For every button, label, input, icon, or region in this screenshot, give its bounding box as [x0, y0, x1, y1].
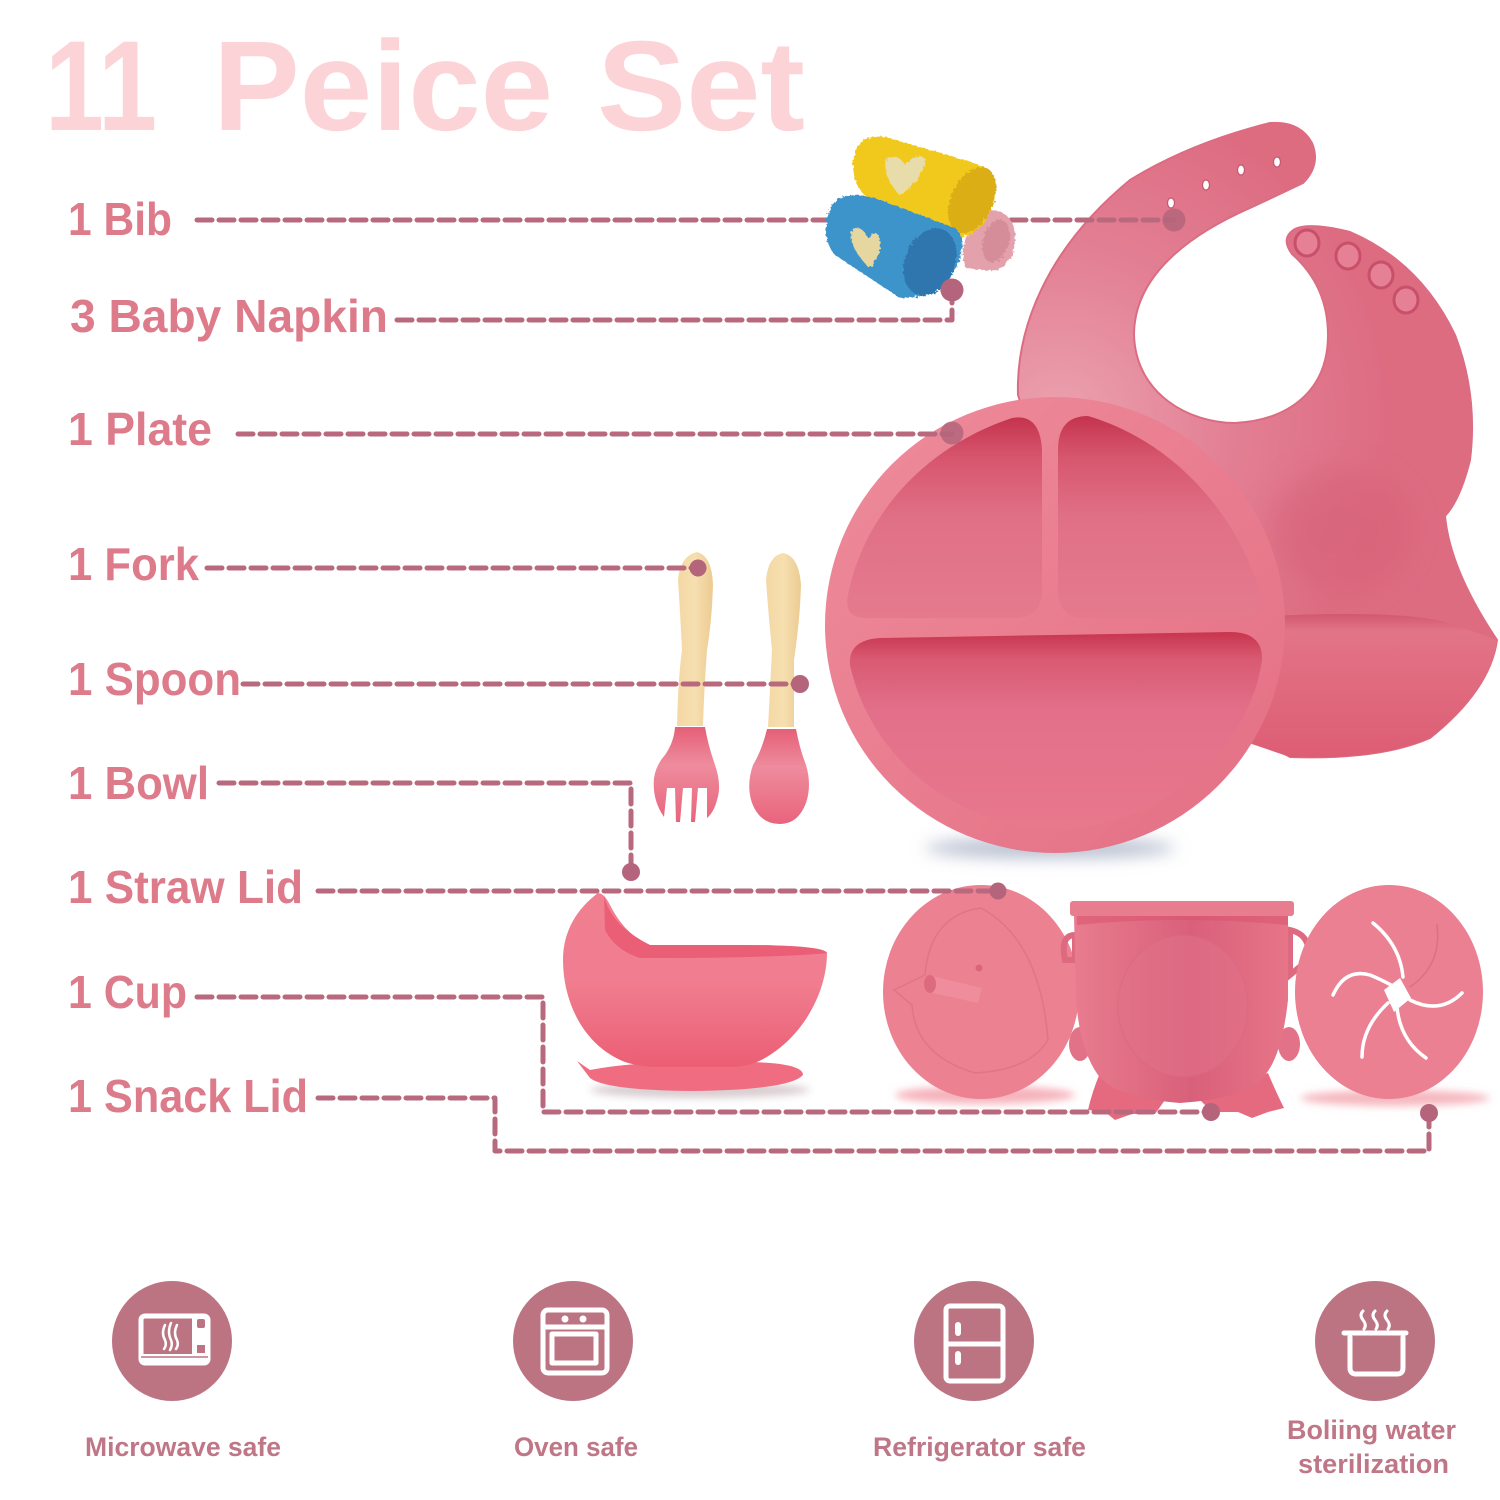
- connector: 3 Baby Napkin: [397, 292, 952, 320]
- title: Set: [597, 15, 805, 158]
- title: Peice: [213, 15, 553, 158]
- caption: refrigerator safe: Refrigerator safe: [873, 1432, 1086, 1462]
- illustration: snack lid: [1295, 885, 1490, 1106]
- yellow napkin: [853, 137, 1006, 241]
- label: 3 Baby Napkin: 3 Baby Napkin: [70, 290, 388, 342]
- label: 1 Snack Lid: 1 Snack Lid: [68, 1070, 308, 1122]
- marker dots: [622, 208, 1438, 1122]
- connector: 1 Plate: [238, 432, 952, 436]
- title: [45, 15, 805, 158]
- caption: microwave safe: Microwave safe: [85, 1432, 281, 1462]
- connector: 1 Bowl: [219, 783, 631, 872]
- illustration: straw lid: [883, 885, 1079, 1104]
- icon: boiling water sterilization: [1315, 1281, 1435, 1401]
- title: 11: [45, 15, 157, 158]
- connector: 1 Spoon: [243, 682, 800, 686]
- illustration: silicone bib: [1018, 123, 1497, 757]
- label: 1 Spoon: 1 Spoon: [68, 653, 241, 705]
- neck tab buttons: [1295, 230, 1418, 313]
- pink napkin: [963, 210, 1015, 270]
- caption: boiling water sterilization: [1287, 1415, 1456, 1479]
- label: 1 Plate: 1 Plate: [68, 403, 212, 455]
- connector: 1 Snack Lid: [318, 1098, 1429, 1151]
- label: 1 Bowl: 1 Bowl: [68, 757, 209, 809]
- illustration: spoon: [749, 553, 809, 824]
- connector: 1 Straw Lid: [318, 888, 998, 894]
- label: 1 Fork: 1 Fork: [68, 538, 199, 590]
- label: 1 Straw Lid: 1 Straw Lid: [68, 861, 303, 913]
- label: 1 Cup: 1 Cup: [68, 966, 187, 1018]
- illustration: three rolled napkins: [826, 137, 1015, 304]
- connector: 1 Cup: [197, 997, 1211, 1112]
- illustration: divided plate: [825, 397, 1285, 858]
- caption: boiling water sterilization: sterilization: [1298, 1449, 1449, 1479]
- icon: oven safe: [513, 1281, 633, 1401]
- strap holes: [1168, 157, 1280, 208]
- icon: refrigerator safe: [914, 1281, 1034, 1401]
- connector: 1 Bib: [197, 218, 1174, 222]
- icon: microwave safe: [112, 1281, 232, 1401]
- caption: boiling water sterilization: Boliing water: [1287, 1415, 1456, 1445]
- illustration: suction bowl: [563, 893, 827, 1098]
- illustration: fork: [654, 552, 719, 822]
- label: 1 Bib: 1 Bib: [68, 193, 172, 245]
- illustration: penguin cup: [1064, 901, 1309, 1120]
- blue napkin: [826, 195, 966, 304]
- connector: 1 Fork: [207, 566, 698, 570]
- caption: oven safe: Oven safe: [514, 1432, 638, 1462]
